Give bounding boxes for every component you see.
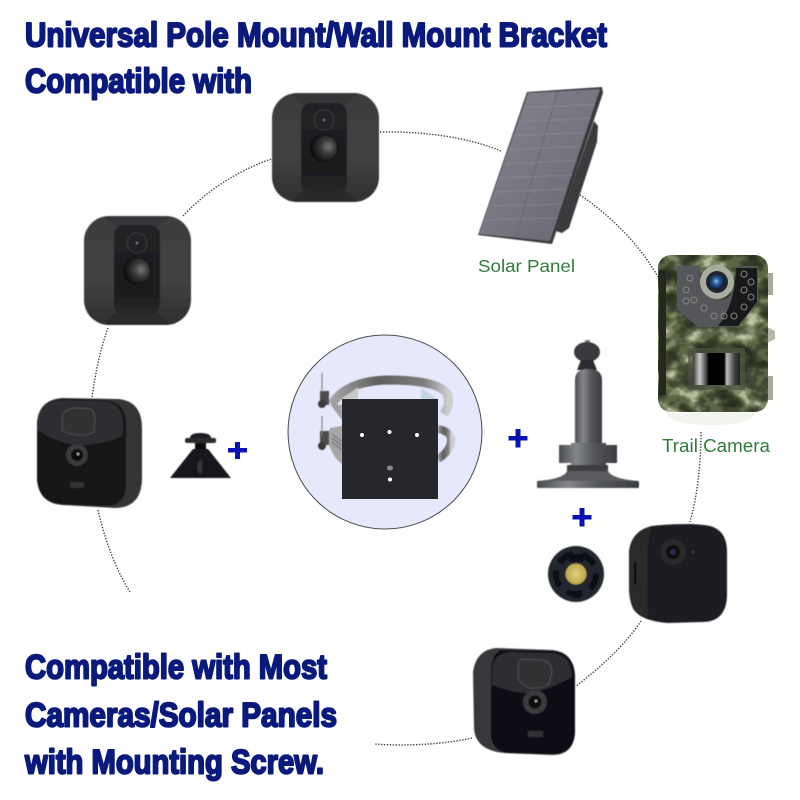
icon: plus lower xyxy=(572,508,592,526)
heading: compatible with most cameras: Cameras/Solar Panels xyxy=(25,696,337,734)
icon: camera bottom (Blink Outdoor) xyxy=(473,648,575,755)
label: solar panel: Solar Panel xyxy=(478,256,575,276)
icon: camera right (Blink Outdoor 4) xyxy=(629,524,727,623)
heading: compatible with most cameras: Compatible with Most xyxy=(25,648,327,686)
title: universal pole mount xyxy=(25,16,607,100)
icon: wall mount stand xyxy=(537,340,639,488)
label: trail camera: Trail Camera xyxy=(662,436,771,456)
icon: trail camera xyxy=(655,252,775,425)
title: universal pole mount: Compatible with xyxy=(25,62,252,100)
icon: camera left (Blink Outdoor) xyxy=(37,398,142,508)
heading: compatible with most cameras: with Mounting Screw. xyxy=(24,744,324,782)
icon: plus left xyxy=(228,442,247,459)
icon: round adapter with brass screw xyxy=(548,546,604,602)
icon: camera top (Blink XT) xyxy=(272,93,379,202)
dotted connecting ring xyxy=(92,132,701,745)
square mounting plate xyxy=(342,399,438,499)
metal hose clamps xyxy=(318,373,451,464)
panel: pole mount bracket xyxy=(288,335,482,529)
title: universal pole mount: Universal Pole Mount/Wall Mount Bracket xyxy=(25,16,607,54)
icon: round cone mount xyxy=(170,433,231,478)
icon: camera left (Blink XT) xyxy=(84,216,191,325)
icon: plus right xyxy=(508,429,528,448)
icon: solar panel xyxy=(478,87,603,244)
heading: compatible with most cameras xyxy=(24,648,337,782)
